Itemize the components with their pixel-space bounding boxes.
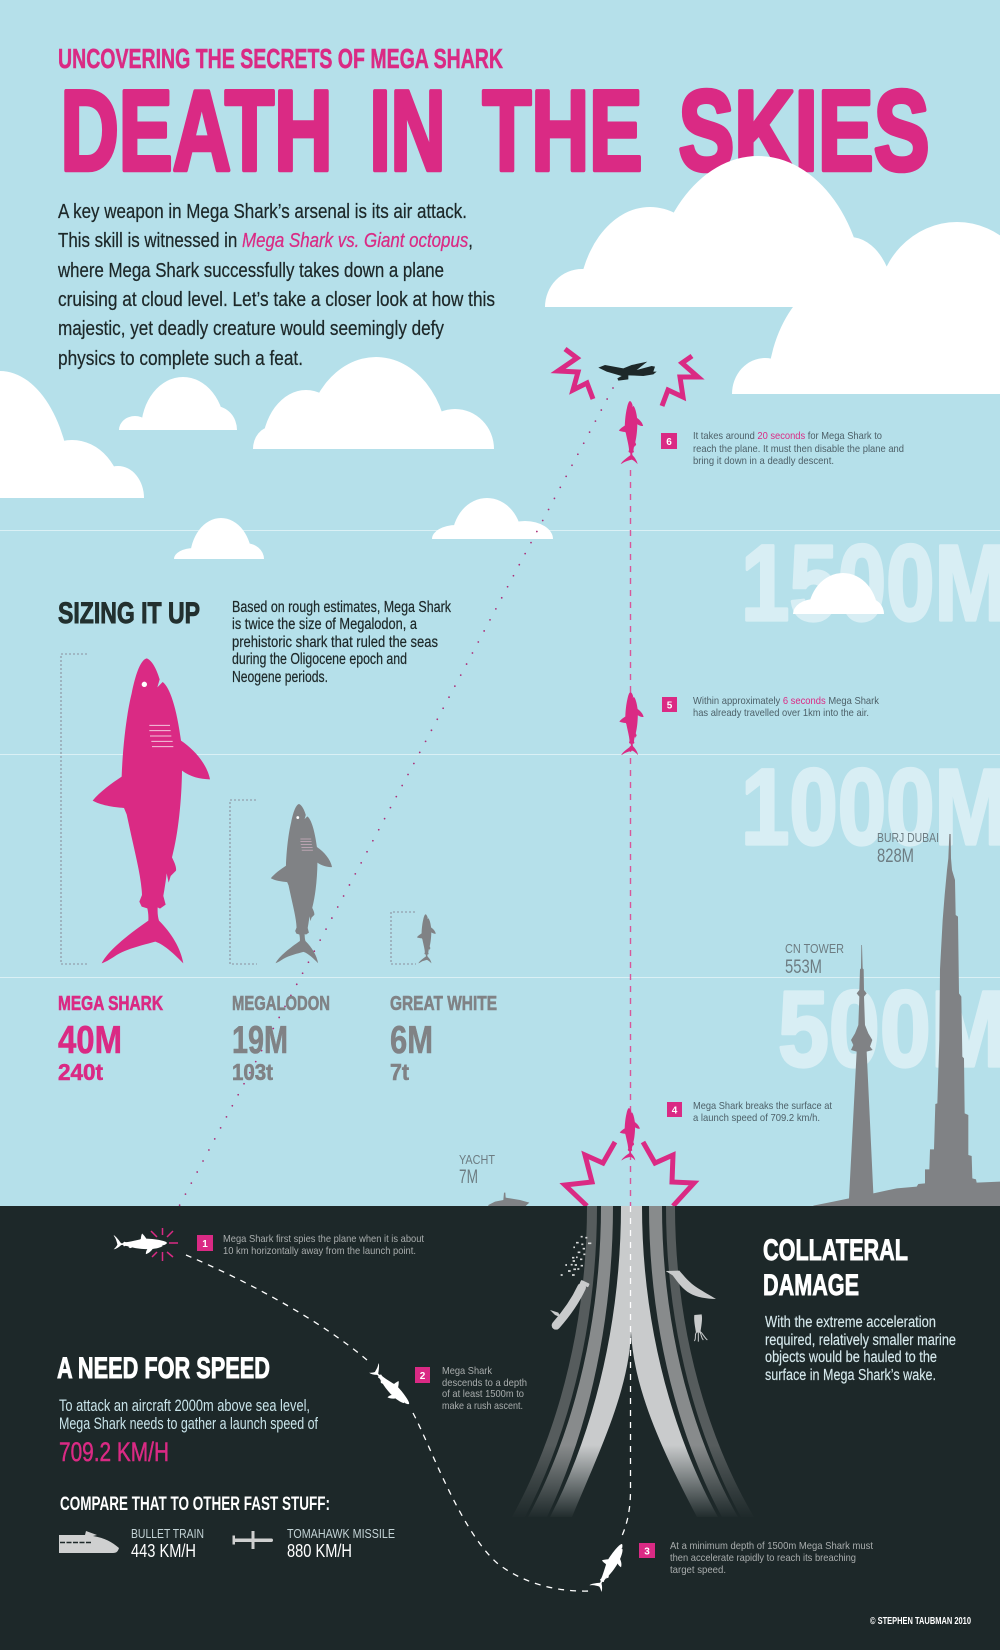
icon: right breach bolt [643,1142,694,1206]
shark at step 4 [620,1108,640,1160]
dashed vertical ascent line [630,470,632,1206]
step 2 text: make a rush ascent. [442,1400,523,1412]
icon: white shark [588,1539,631,1594]
icon: missile [232,1531,273,1549]
step 5 text: has already travelled over 1km into the air. [693,707,869,719]
title [60,68,930,195]
icon: right bolt [662,356,698,406]
stats: megalodon: MEGALODON [232,992,330,1015]
label: CN Tower [785,942,844,978]
label: Burj Dubai: 828M [877,846,914,867]
sizing description: during the Oligocene epoch and [232,651,407,668]
heading: SIZING IT UP [58,597,200,630]
kicker heading: UNCOVERING THE SECRETS OF MEGA SHARK [58,43,503,74]
icon: yacht [488,1193,529,1207]
intro paragraph: where Mega Shark successfully takes down a plane [57,259,444,282]
intro paragraph: majestic, yet deadly creature would seemingly defy [58,317,445,340]
step 5 note [662,695,880,719]
label: Burj Dubai [877,831,939,867]
plane with lightning bolts [558,349,698,406]
step 2: descending shark [366,1362,527,1412]
icon: whale [666,1271,716,1299]
step 2 text [442,1365,527,1412]
label: Burj Dubai: BURJ DUBAI [877,831,939,845]
stats: great white: GREAT WHITE [390,992,497,1015]
step 2 text: Mega Shark [442,1365,493,1377]
collateral text: surface in Mega Shark’s wake. [765,1367,936,1384]
shark at step 6 [619,401,643,464]
step 4 text: a launch speed of 709.2 km/h. [693,1112,820,1124]
heading: COLLATERAL [763,1234,908,1267]
label: yacht: YACHT [459,1153,495,1167]
train label: BULLET TRAIN [131,1527,204,1541]
sizing description: Based on rough estimates, Mega Shark [232,599,451,616]
step 3: accelerating shark [588,1539,873,1594]
label: CN Tower: CN TOWER [785,942,844,956]
stats: great white: 6M [390,1019,433,1062]
step 3 text: At a minimum depth of 1500m Mega Shark must [670,1540,873,1552]
step 1 text: 10 km horizontally away from the launch point. [223,1245,416,1257]
dotted attack line from launch to plane [176,388,613,1212]
stats: megalodon: 103t [232,1059,273,1085]
heading [763,1234,908,1302]
sea background [0,1206,1000,1650]
speed value: 709.2 KM/H [59,1437,169,1467]
badge 4: 4 [672,1106,678,1116]
step 4 text [693,1100,832,1124]
size brackets [61,654,416,964]
missile speed: 880 KM/H [287,1541,352,1561]
intro paragraph: cruising at cloud level. Let’s take a closer look at how this [58,288,495,311]
icon: squid [694,1314,707,1342]
intro paragraph: A key weapon in Mega Shark’s arsenal is its air attack. [58,200,467,223]
great white silhouette [417,914,436,963]
speed text [59,1397,318,1433]
intro paragraph [57,200,495,370]
speed text: Mega Shark needs to gather a launch speed of [59,1415,318,1433]
step 3 text [670,1540,873,1576]
step 3 text: target speed. [670,1564,726,1576]
step 6 note [661,430,904,467]
stats: megalodon [232,992,330,1085]
step 6 text: reach the plane. It must then disable the plane and [693,443,904,455]
icon: white shark [366,1362,415,1411]
step 2 text: descends to a depth [442,1377,527,1389]
missile label: TOMAHAWK MISSILE [287,1527,395,1541]
stats: great white: 7t [390,1059,409,1085]
comparison: missile [232,1527,395,1561]
CN tower and Burj Dubai silhouette [813,834,1000,1207]
label: CN Tower: 553M [785,957,822,978]
wake bands [490,1206,780,1519]
step 1 text [223,1233,424,1257]
sizing description: is twice the size of Megalodon, a [232,616,417,633]
icon: plane [598,362,657,381]
step 6 text [693,430,904,467]
intro paragraph: This skill is witnessed in Mega Shark vs. Giant octopus, [58,229,473,252]
stats: mega shark: 40M [58,1019,122,1062]
stats: megalodon: 19M [232,1019,288,1062]
surface breach bolts [565,1142,694,1206]
badge 3: 3 [644,1546,650,1558]
heading: A NEED FOR SPEED [57,1352,270,1385]
collateral text: With the extreme acceleration [765,1314,936,1331]
icon: white shark [114,1234,167,1254]
badge 4 [667,1102,682,1117]
step 1: spotting shark [114,1228,424,1261]
collateral text: objects would be hauled to the [765,1349,937,1366]
buildings and ground [459,831,1000,1207]
label: yacht [459,1153,495,1188]
heading: DAMAGE [763,1269,859,1302]
title: DEATH [60,68,332,195]
white dashed route underwater [186,1206,630,1591]
collateral text [765,1314,956,1384]
step 2 text: of at least 1500m to [442,1388,524,1400]
sky background [0,0,1000,1206]
sizing description: prehistoric shark that ruled the seas [232,634,438,651]
icon: train [59,1531,119,1553]
shark at step 5 [619,692,644,755]
stats: mega shark: 240t [58,1059,103,1085]
train speed: 443 KM/H [131,1541,196,1561]
megalodon silhouette [271,804,332,963]
title: IN [370,68,446,195]
sizing it up section [58,597,497,1085]
title: THE [482,68,642,195]
badge 6: 6 [666,437,672,448]
badge 6 [661,433,677,449]
icon: left bolt [558,349,593,399]
intro paragraph: physics to complete such a feat. [58,347,303,370]
comparison: bullet train [59,1527,204,1561]
step 6 text: It takes around 20 seconds for Mega Shark to [693,430,882,442]
step 4 note [667,1100,832,1124]
step 5 text: Within approximately 6 seconds Mega Shark [693,695,880,707]
mega shark silhouette [93,658,210,963]
speed text: To attack an aircraft 2000m above sea level, [59,1397,310,1415]
badge 3 [639,1543,655,1558]
collateral damage section [763,1234,956,1384]
school of fish [561,1237,591,1275]
badge 1 [197,1235,213,1251]
icon: submarine [550,1280,590,1325]
icon: left breach bolt [565,1142,615,1206]
sizing description: Neogene periods. [232,669,328,686]
stats: great white [390,992,497,1085]
need for speed section [57,1352,395,1561]
stats: mega shark [58,992,163,1085]
badge 1: 1 [202,1239,208,1250]
label: yacht: 7M [459,1167,478,1188]
stats: mega shark: MEGA SHARK [58,992,163,1015]
step 3 text: then accelerate rapidly to reach its breaching [670,1552,856,1564]
collateral text: required, relatively smaller marine [765,1332,956,1349]
step 6 text: bring it down in a deadly descent. [693,455,834,467]
step 5 text [693,695,880,719]
badge 2 [415,1367,430,1383]
step 1 text: Mega Shark first spies the plane when it is about [223,1233,424,1245]
badge 5 [662,697,677,712]
sizing description [232,599,451,686]
icon: sight burst [151,1228,178,1261]
badge 5: 5 [667,700,673,712]
step 4 text: Mega Shark breaks the surface at [693,1100,832,1112]
compare heading: COMPARE THAT TO OTHER FAST STUFF: [60,1494,330,1515]
badge 2: 2 [420,1371,426,1382]
clouds [0,156,1000,614]
